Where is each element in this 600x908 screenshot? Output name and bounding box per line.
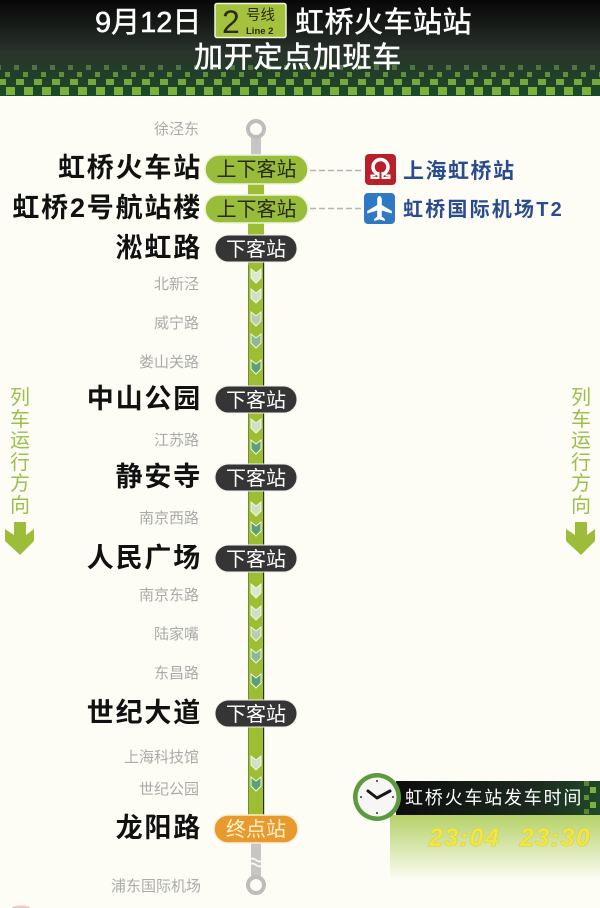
stopping station names: 人民广场	[87, 543, 202, 573]
pills: 下客站: 下客站	[226, 389, 286, 412]
arrow right	[566, 522, 595, 555]
skipped station names: 北新泾	[154, 276, 199, 293]
title line 2: 加开定点加班车	[194, 41, 402, 74]
title line 1 date: 9月12日	[95, 7, 201, 39]
direction label right: 车	[571, 408, 591, 431]
skipped station names: 娄山关路	[139, 354, 199, 371]
icon: railway	[365, 154, 396, 185]
direction label left: 行	[10, 451, 30, 474]
title bar text: 虹桥火车站发车时间	[405, 788, 583, 808]
panel fade background	[390, 815, 600, 881]
direction label right: 运	[571, 430, 591, 452]
skipped station names: 上海科技馆	[124, 749, 199, 766]
line 2 badge: 号线	[246, 7, 275, 24]
bottom terminal	[248, 877, 264, 893]
direction label left: 方	[10, 472, 30, 495]
icon: clock	[353, 773, 401, 821]
pills: 下客站: 下客站	[226, 548, 286, 571]
skipped station names: 南京东路	[139, 587, 199, 604]
stopping station names: 虹桥2号航站楼	[12, 193, 202, 223]
connector dashes	[310, 170, 363, 208]
pill: 终点站: 终点站	[226, 818, 286, 841]
skipped station names: 徐泾东	[154, 121, 199, 138]
direction label left	[10, 386, 30, 517]
skipped station names	[111, 121, 201, 895]
stopping station names: 淞虹路	[116, 233, 202, 263]
direction label right: 行	[571, 451, 591, 474]
pill: 上下客站 1	[205, 155, 308, 184]
pills: 下客站: 下客站	[226, 467, 286, 490]
arrow left	[5, 522, 34, 555]
departure times: 23:04	[428, 824, 500, 852]
label: railway station: 上海虹桥站	[403, 160, 516, 183]
green line	[248, 180, 264, 820]
direction label right: 列	[571, 386, 591, 409]
stopping station names: 龙阳路	[116, 813, 202, 843]
direction label left: 运	[10, 430, 30, 452]
title bar	[396, 781, 600, 815]
direction label left: 向	[10, 494, 30, 517]
pill: 上下客站 2	[205, 195, 308, 223]
stopping station names: 世纪大道	[87, 698, 202, 728]
grey line bottom	[251, 815, 261, 877]
grey line top	[251, 135, 261, 160]
skipped station names: 江苏路	[154, 432, 199, 449]
direction label right: 方	[571, 472, 591, 495]
top terminal	[248, 121, 264, 137]
line 2 badge	[215, 4, 286, 40]
direction label right: 向	[571, 494, 591, 517]
direction chevrons	[251, 269, 261, 791]
departure panel	[390, 781, 600, 881]
stopping station names	[12, 153, 202, 843]
stopping station names: 虹桥火车站	[58, 153, 202, 183]
label: airport: 虹桥国际机场T2	[403, 198, 564, 221]
pill: 终点站	[214, 815, 298, 843]
direction label left: 车	[10, 408, 30, 431]
icon: airplane	[364, 193, 395, 224]
pill: 上下客站 1: 上下客站	[216, 158, 296, 181]
pills: 下客站: 下客站	[226, 238, 286, 261]
stopping station names: 中山公园	[87, 384, 202, 414]
stopping station names: 静安寺	[116, 462, 202, 492]
direction label left: 列	[10, 386, 30, 409]
skipped station names: 南京西路	[139, 510, 199, 527]
line 2 badge: 2	[222, 4, 240, 40]
skipped station names: 陆家嘴	[154, 626, 199, 643]
line 2 badge: Line 2	[246, 26, 273, 37]
skipped station names: 东昌路	[154, 665, 199, 682]
pills: 下客站: 下客站	[226, 703, 286, 726]
direction label right	[571, 386, 591, 517]
title line 1 station: 虹桥火车站站	[295, 6, 472, 39]
skipped station names: 世纪公园	[139, 781, 199, 798]
header banner	[0, 0, 600, 96]
departure panel: 23:30	[519, 824, 591, 852]
skipped station names: 威宁路	[154, 315, 199, 332]
pill: 上下客站 2: 上下客站	[216, 198, 296, 221]
metro line	[248, 121, 264, 893]
pills: 下客站	[215, 235, 297, 727]
bottom edge smudge	[12, 906, 30, 908]
skipped station names: 浦东国际机场	[111, 878, 201, 895]
